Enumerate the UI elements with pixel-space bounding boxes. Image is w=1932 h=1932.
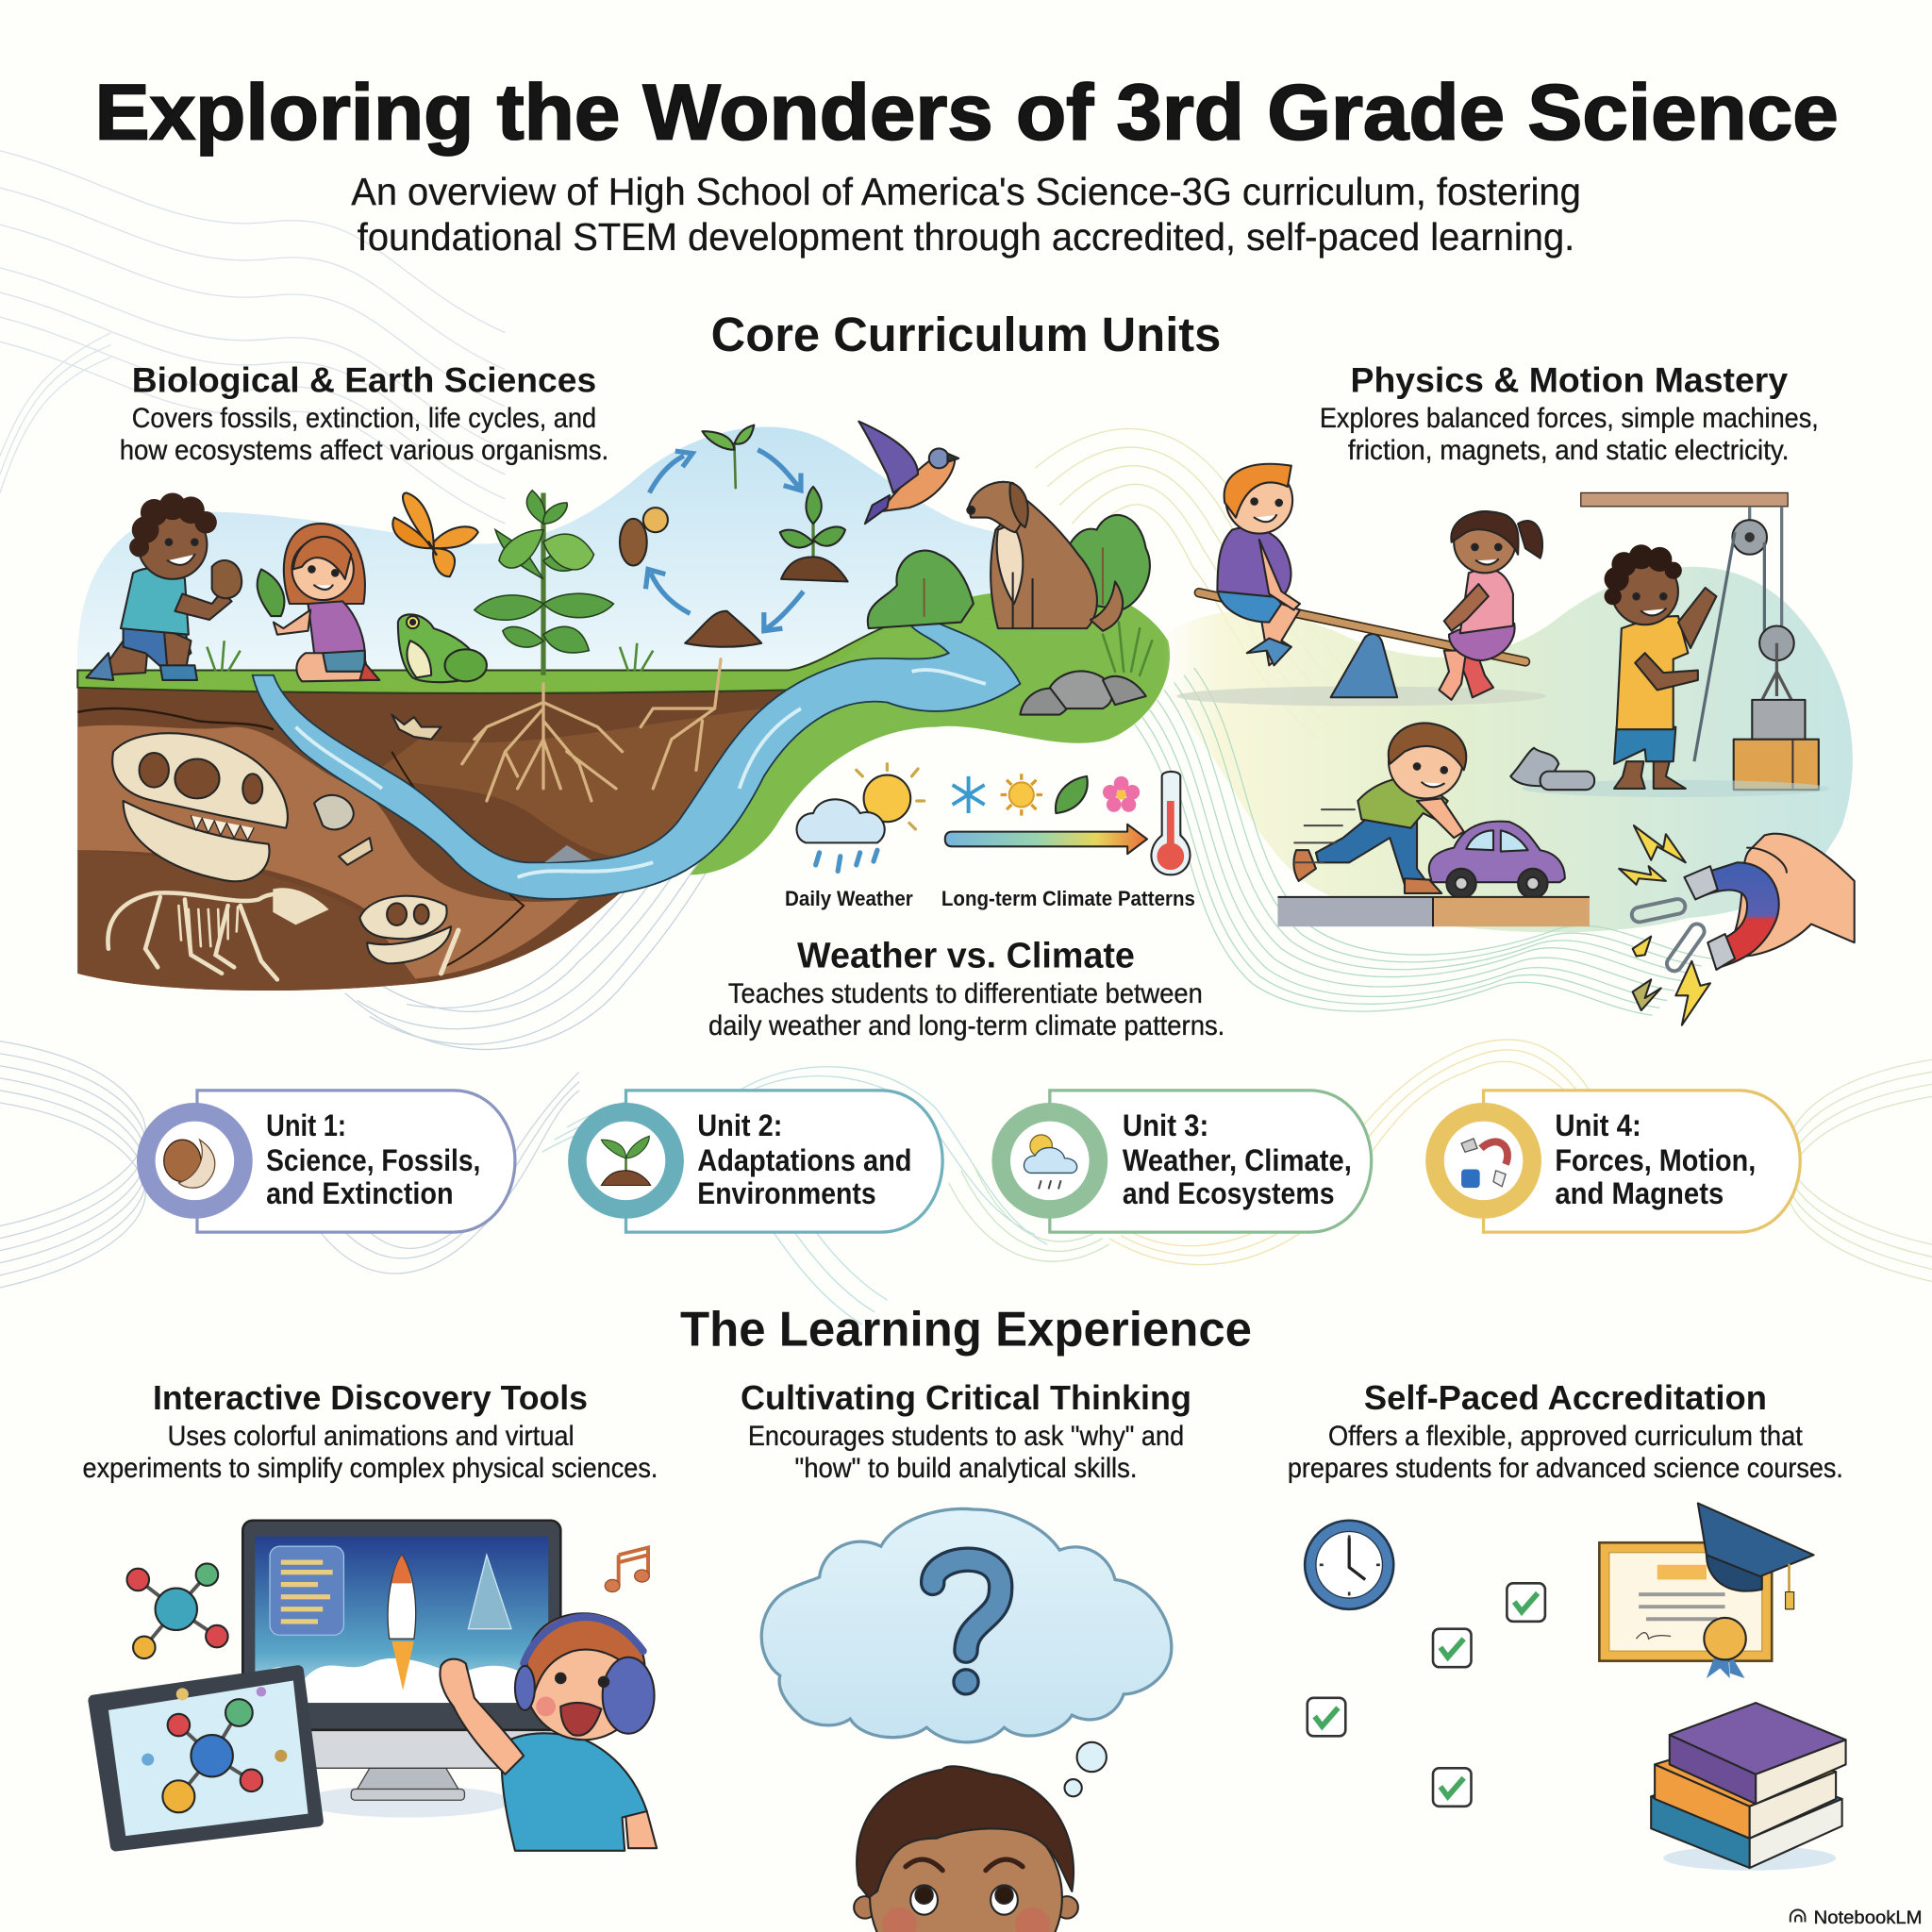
graduation cap [1698, 1503, 1814, 1609]
text block: self-paced accreditation: Offers a flexible, approved curriculum that [1328, 1421, 1803, 1452]
flow lines: unit band [0, 1040, 1932, 1324]
unit 2 icon badge [568, 1103, 684, 1219]
life cycle [620, 425, 848, 647]
unit 3 card [991, 1091, 1372, 1232]
unit 2 card [568, 1091, 942, 1232]
question mark [933, 1559, 1001, 1694]
season icons [953, 774, 1140, 816]
music note [605, 1547, 649, 1592]
motion lines [1293, 809, 1356, 862]
text block: self-paced accreditation [1288, 1378, 1843, 1484]
weather description: daily weather and long-term climate patterns. [708, 1010, 1224, 1041]
green hill [690, 586, 1170, 874]
sky backdrop [77, 426, 1109, 690]
unit 3 text: and Ecosystems [1123, 1176, 1335, 1210]
monitor [242, 1521, 560, 1818]
unit 1 text [266, 1108, 480, 1210]
thinking child [854, 1766, 1078, 1932]
illustration: physics backdrop [1164, 567, 1853, 932]
text block: biological and earth sciences: how ecosystems affect various organisms. [120, 435, 608, 466]
unit 2 text: Environments [697, 1176, 876, 1210]
toy car [1429, 822, 1565, 898]
seesaw [1176, 592, 1546, 706]
seedling in soil [780, 487, 848, 581]
subtitle [351, 170, 1581, 258]
seed [620, 508, 668, 566]
text block: physics and motion mastery [1320, 359, 1819, 466]
flow lines: centre and right scene [1035, 429, 1368, 740]
lightning sparks [1619, 825, 1710, 1025]
plant [475, 491, 613, 675]
grass tufts [207, 641, 653, 672]
unit 1 text: Unit 1: [266, 1108, 346, 1142]
long-term climate label: Long-term Climate Patterns [941, 887, 1195, 910]
bird [858, 422, 958, 524]
unit 3 text [1123, 1108, 1352, 1210]
text block: cultivating critical thinking: "how" to build analytical skills. [794, 1453, 1138, 1484]
unit 1 text: and Extinction [266, 1176, 454, 1210]
heading: core curriculum units: Core Curriculum Units [711, 308, 1221, 361]
sprout [702, 425, 754, 488]
unit 3 text: Weather, Climate, [1123, 1143, 1352, 1177]
unit 4 text: and Magnets [1555, 1176, 1724, 1210]
flow lines: under fossils [345, 832, 712, 1049]
text block: biological and earth sciences [120, 359, 608, 466]
unit 1 icon badge [137, 1103, 253, 1219]
diploma [1599, 1542, 1772, 1678]
text block: biological and earth sciences: Covers fossils, extinction, life cycles, and [132, 403, 596, 434]
illustration: physics scene [1176, 464, 1855, 1025]
pulley system [1522, 492, 1830, 797]
text block: interactive discovery tools [83, 1378, 658, 1484]
rock and bones [314, 715, 441, 865]
illustration: thought cloud [761, 1508, 1172, 1932]
text block: physics and motion mastery: friction, magnets, and static electricity. [1348, 435, 1789, 466]
text block: physics and motion mastery: Explores balanced forces, simple machines, [1320, 403, 1819, 434]
girl with leaf [258, 524, 379, 681]
flow lines: green wave [1135, 668, 1711, 1015]
small skull fossil [359, 896, 458, 974]
text block: interactive discovery tools: experiments to simplify complex physical sciences. [83, 1453, 658, 1484]
checkmarks [1307, 1583, 1545, 1807]
unit 2 text: Adaptations and [697, 1143, 912, 1177]
unit 4 text: Forces, Motion, [1555, 1143, 1756, 1177]
t-rex skull fossil [112, 733, 288, 881]
thought bubbles [1064, 1742, 1107, 1796]
cycle arrows [645, 450, 804, 631]
rocks and reeds [1020, 623, 1152, 715]
unit 4 text: Unit 4: [1555, 1108, 1641, 1142]
friction surfaces [1277, 897, 1590, 926]
unit 4 text [1555, 1108, 1756, 1210]
gear pile [1510, 748, 1594, 790]
river [253, 616, 1020, 899]
unit 4 card [1425, 1091, 1800, 1232]
soil cross-section [77, 685, 789, 991]
unit 2 text [697, 1108, 912, 1210]
thermometer [1151, 772, 1191, 874]
unit 1 card [137, 1091, 515, 1232]
text block: biological and earth sciences: Biological & Earth Sciences [132, 359, 596, 399]
molecule [127, 1563, 228, 1658]
butterfly [392, 492, 478, 576]
unit 3 text: Unit 3: [1123, 1108, 1208, 1142]
cloud and sun icon [797, 764, 924, 871]
flow lines: top left [0, 148, 506, 524]
weather description [708, 978, 1224, 1041]
unit 2 text: Unit 2: [697, 1108, 782, 1142]
boy pulling rope [1605, 544, 1716, 789]
illustration: weather panel [708, 764, 1224, 1041]
climate arrow [945, 824, 1147, 854]
tablet [93, 1671, 318, 1846]
daily weather label: Daily Weather [785, 887, 913, 910]
boy on seesaw [1217, 464, 1300, 665]
text block: interactive discovery tools: Uses colorful animations and virtual [168, 1421, 575, 1452]
text block: cultivating critical thinking [741, 1378, 1191, 1484]
text block: interactive discovery tools: Interactive Discovery Tools [153, 1378, 588, 1417]
grass ground [77, 616, 949, 693]
frog [398, 614, 487, 682]
weather vs climate heading: Weather vs. Climate [797, 936, 1135, 975]
books [1651, 1703, 1846, 1871]
weather description: Teaches students to differentiate between [728, 978, 1203, 1009]
boy with headphones [440, 1613, 657, 1851]
subtitle: An overview of High School of America's Science-3G curriculum, fostering [351, 170, 1581, 213]
text block: self-paced accreditation: Self-Paced Accreditation [1364, 1378, 1767, 1417]
text block: cultivating critical thinking: Encourages students to ask "why" and [748, 1421, 1184, 1452]
unit 3 icon badge [991, 1103, 1108, 1219]
illustration: interactive discovery tools [93, 1521, 657, 1851]
illustration: self-paced accreditation [1305, 1503, 1846, 1871]
dinosaur skeleton [108, 889, 327, 979]
plant roots [462, 659, 721, 801]
trees [868, 515, 1150, 628]
heading: the learning experience: The Learning Experience [680, 1302, 1252, 1357]
soil pile [685, 611, 761, 647]
boy with fossil [86, 492, 242, 680]
watermark: NotebookLM [1814, 1908, 1923, 1928]
clock [1305, 1521, 1393, 1609]
subtitle: foundational STEM development through accredited, self-paced learning. [358, 215, 1574, 258]
dog [967, 482, 1123, 631]
cloud [761, 1508, 1172, 1742]
boy pushing car [1293, 723, 1466, 893]
girl on seesaw [1440, 511, 1542, 700]
text block: cultivating critical thinking: Cultivating Critical Thinking [741, 1378, 1191, 1417]
magnet and hand [1684, 834, 1855, 970]
unit 4 icon badge [1425, 1103, 1541, 1219]
unit 1 text: Science, Fossils, [266, 1143, 480, 1177]
title: Exploring the Wonders of 3rd Grade Science [95, 68, 1839, 157]
text block: self-paced accreditation: prepares students for advanced science courses. [1288, 1453, 1843, 1484]
paper clips [1630, 898, 1707, 974]
text block: physics and motion mastery: Physics & Motion Mastery [1351, 359, 1788, 399]
illustration: biology and earth scene [77, 422, 1170, 991]
